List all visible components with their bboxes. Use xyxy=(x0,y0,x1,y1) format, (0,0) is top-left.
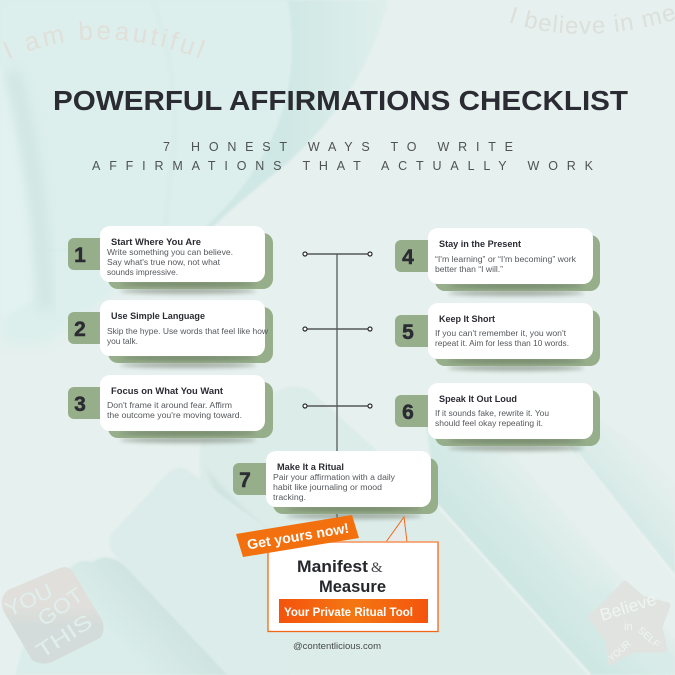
sticker: believe in yourself: Believe xyxy=(598,590,659,625)
step 2: you talk. xyxy=(107,336,138,346)
timeline connector xyxy=(303,252,372,520)
product box: Manifest xyxy=(297,557,368,576)
product box: Measure xyxy=(319,577,386,596)
step 7: 7 xyxy=(239,469,251,492)
step 7 xyxy=(233,451,438,519)
product box: Your Private Ritual Tool xyxy=(284,607,413,619)
step 6: If it sounds fake, rewrite it. You xyxy=(435,408,549,418)
step 4: “I'm learning” or “I'm becoming” work xyxy=(435,254,577,264)
sticker: you got this: THIS xyxy=(32,610,97,663)
subtitle: 7 HONEST WAYS TO WRITE xyxy=(163,140,513,154)
step 1: Say what's true now, not what xyxy=(107,257,221,267)
step 2: Use Simple Language xyxy=(111,311,205,322)
step 2 xyxy=(68,300,273,368)
step 1: sounds impressive. xyxy=(107,267,178,277)
sticker: believe in yourself: YOUR xyxy=(607,639,633,664)
step 5: 5 xyxy=(402,321,414,344)
step 1 xyxy=(68,226,273,294)
step 6 xyxy=(395,383,600,451)
callout pointer xyxy=(386,517,407,542)
step 4: 4 xyxy=(402,246,414,269)
step 3 xyxy=(68,375,273,443)
sticker: you got this xyxy=(1,567,104,664)
step 6: should feel okay repeating it. xyxy=(435,418,543,428)
step 2: Skip the hype. Use words that feel like how xyxy=(107,326,269,336)
subtitle xyxy=(92,140,594,173)
footer handle: @contentlicious.com xyxy=(293,641,381,652)
sticker: believe in yourself: in xyxy=(624,621,633,633)
step 7: Make It a Ritual xyxy=(277,462,344,473)
step 5: Keep It Short xyxy=(439,314,496,325)
step 3: Don't frame it around fear. Affirm xyxy=(107,400,232,410)
step 6: 6 xyxy=(402,401,414,424)
subtitle: AFFIRMATIONS THAT ACTUALLY WORK xyxy=(92,159,594,173)
step 5: repeat it. Aim for less than 10 words. xyxy=(435,338,569,348)
step 1: 1 xyxy=(74,244,86,267)
step 4: Stay in the Present xyxy=(439,239,522,250)
step 3: 3 xyxy=(74,393,86,416)
step 5: If you can't remember it, you won't xyxy=(435,328,567,338)
background: lower drapes xyxy=(15,387,675,675)
step 3: Focus on What You Want xyxy=(111,386,224,397)
step 2: 2 xyxy=(74,318,86,341)
step 6: Speak It Out Loud xyxy=(439,394,517,405)
step 3: the outcome you're moving toward. xyxy=(107,410,242,420)
product box xyxy=(268,542,438,632)
step 7: tracking. xyxy=(273,492,306,502)
step 7: habit like journaling or mood xyxy=(273,482,382,492)
decorative text: I am beautiful: I am beautiful xyxy=(3,21,205,59)
step 5 xyxy=(395,303,600,371)
step 4: better than “I will.” xyxy=(435,264,503,274)
product box: & xyxy=(371,560,383,576)
sticker: you got this: YOU xyxy=(1,580,56,622)
badge: get yours now: Get yours now! xyxy=(246,520,350,552)
badge: get yours now xyxy=(236,515,359,557)
step 7: Pair your affirmation with a daily xyxy=(273,472,396,482)
step 1: Write something you can believe. xyxy=(107,247,233,257)
sticker: believe in yourself xyxy=(590,583,668,664)
title: POWERFUL AFFIRMATIONS CHECKLIST xyxy=(53,85,628,116)
background: upper left drapes xyxy=(0,0,388,345)
step 1: Start Where You Are xyxy=(111,237,201,248)
step 4 xyxy=(395,228,600,296)
sticker: you got this: GOT xyxy=(34,583,88,631)
sticker: believe in yourself: SELF xyxy=(635,625,662,651)
